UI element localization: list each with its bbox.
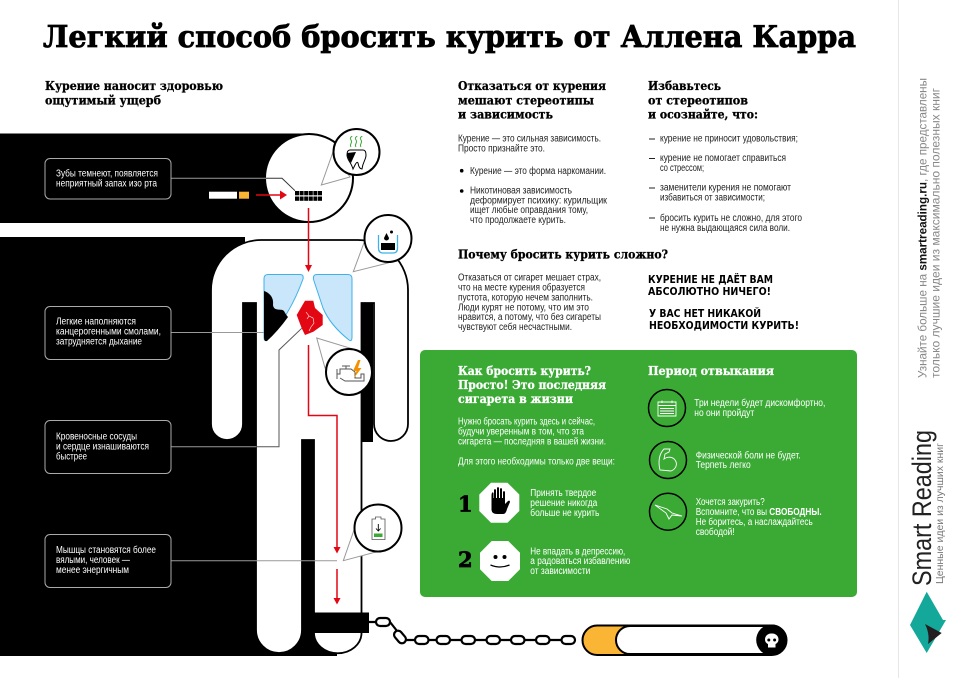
- column: realize: [648, 78, 802, 234]
- step 2: Не впадать в депрессию,: [530, 546, 625, 557]
- withdrawal item: calendar: но они пройдут: [694, 408, 755, 419]
- section: why hard: [458, 246, 668, 333]
- section: why hard: нравится, а потому, что без сигареты: [458, 311, 601, 323]
- step 2: [458, 541, 631, 581]
- callout box: muscles: [45, 534, 337, 588]
- callout box: teeth: неприятный запах изо рта: [56, 179, 157, 190]
- sidebar logo wordmark: Ценные идеи из лучших книг: [935, 443, 946, 584]
- section: why hard: пустота, которую нечем заполнить.: [458, 292, 593, 304]
- callout: battery: [343, 504, 402, 561]
- right lung: [313, 274, 352, 341]
- arrow: to foot: [334, 569, 340, 604]
- withdrawal item: calendar: [648, 390, 825, 426]
- panel: black background of body: [0, 237, 337, 656]
- sidebar promo text: только лучшие идеи из максимально полезных книг: [928, 87, 942, 378]
- withdrawal item: muscle: Терпеть легко: [696, 460, 751, 471]
- callout box: lungs: [45, 306, 264, 360]
- heading: health damage: [45, 78, 223, 108]
- callout box: teeth: [45, 158, 295, 199]
- section: why hard: Люди курят не потому, что им это: [458, 302, 589, 313]
- sidebar logo wordmark: [907, 430, 946, 586]
- icon: smile: [490, 555, 510, 567]
- step 1: [458, 483, 599, 523]
- callout box: muscles: вялыми, человек —: [56, 555, 130, 566]
- sidebar divider: [898, 0, 900, 678]
- column: realize: Избавьтесь: [648, 78, 721, 93]
- callout box: vessels: Кровеносные сосуды: [56, 431, 137, 442]
- section: why hard: Отказаться от сигарет мешает страх,: [458, 273, 601, 284]
- panel: black background of head: [0, 134, 309, 223]
- arrow: smoke into mouth: [256, 190, 287, 200]
- column: stereotypes: Отказаться от курения: [458, 78, 606, 93]
- column: stereotypes: мешают стереотипы: [458, 92, 594, 108]
- icon: teeth: [295, 191, 322, 201]
- withdrawal item: calendar: Три недели будет дискомфортно,: [694, 397, 825, 409]
- step 2: 2: [458, 547, 473, 572]
- withdrawal item: bird: Не боритесь, а наслаждайтесь: [696, 516, 813, 528]
- column: stereotypes: [458, 78, 608, 226]
- withdrawal item: bird: [650, 493, 822, 538]
- emphasis text: НЕОБХОДИМОСТИ КУРИТЬ!: [649, 319, 799, 332]
- step 1: 1: [458, 492, 473, 517]
- withdrawal item: muscle: [650, 442, 801, 478]
- column: realize: курение не приносит удовольствия;: [660, 134, 798, 145]
- heading: how to quit: [458, 363, 606, 406]
- step 2: а радоваться избавлению: [530, 555, 631, 567]
- head circle: [265, 134, 353, 222]
- column: stereotypes: Просто признайте это.: [458, 144, 545, 155]
- step 1: Принять твердое: [530, 488, 597, 499]
- section: why hard: чувствуют себя несчастными.: [458, 321, 572, 333]
- emphasis text: [648, 272, 799, 332]
- step 1: решение никогда: [530, 498, 598, 509]
- icon: skull: [765, 634, 778, 648]
- heading: withdrawal: Период отвыкания: [648, 363, 774, 378]
- withdrawal item: bird: свободой!: [696, 526, 735, 538]
- callout box: vessels: быстрее: [56, 450, 87, 462]
- callout: engine: [317, 338, 372, 395]
- arrow: heart to leg: [308, 345, 340, 554]
- column: stereotypes: и зависимость: [458, 106, 553, 122]
- text: intro: Нужно бросать курить здесь и сейчас,: [458, 416, 595, 428]
- callout: tooth: [321, 129, 380, 185]
- column: realize: заменители курения не помогают: [660, 183, 791, 194]
- column: stereotypes: деформирует психику: курильщик: [470, 194, 608, 206]
- column: realize: курение не помогает справиться: [660, 153, 786, 164]
- callout box: muscles: Мышцы становятся более: [56, 544, 156, 556]
- text: intro: [458, 416, 615, 467]
- emphasis text: У ВАС НЕТ НИКАКОЙ: [649, 307, 761, 320]
- heading: health damage: Курение наносит здоровью: [45, 78, 223, 93]
- column: realize: со стрессом;: [660, 163, 704, 174]
- column: stereotypes: Курение — это форма наркомании.: [470, 165, 606, 177]
- withdrawal item: bird: Вспомните, что вы СВОБОДНЫ.: [696, 507, 822, 518]
- column: realize: избавиться от зависимости;: [660, 192, 765, 204]
- sidebar logo book: [910, 592, 946, 653]
- column: stereotypes: Курение — это сильная зависимость.: [458, 134, 601, 145]
- title: Легкий способ бросить курить от Аллена Карра: [43, 19, 856, 54]
- text: intro: Для этого необходимы только две вещи:: [458, 455, 615, 467]
- column: realize: и осознайте, что:: [648, 106, 758, 122]
- left lung: tar-filled: [264, 274, 303, 341]
- column: realize: бросить курить не сложно, для этого: [660, 212, 802, 224]
- heart: [297, 301, 323, 335]
- section: why hard: что на месте курения образуется: [458, 282, 585, 294]
- callout box: lungs: затрудняется дыхание: [56, 336, 142, 347]
- panel: how to quit: [420, 350, 857, 597]
- text: intro: сигарета — последняя в вашей жизни.: [458, 436, 606, 448]
- withdrawal item: muscle: Физической боли не будет.: [696, 449, 801, 461]
- step 2: от зависимости: [530, 566, 590, 577]
- text: intro: будучи уверенным в том, что эта: [458, 426, 584, 438]
- callout box: lungs: канцерогенными смолами,: [56, 326, 161, 337]
- emphasis text: АБСОЛЮТНО НИЧЕГО!: [648, 285, 771, 298]
- sidebar logo wordmark: Smart Reading: [907, 430, 937, 586]
- callout: tar drop: [353, 215, 412, 272]
- heading: how to quit: Как бросить курить?: [458, 363, 591, 378]
- emphasis text: КУРЕНИЕ НЕ ДАЁТ ВАМ: [648, 272, 773, 286]
- column: stereotypes: что продолжаете курить.: [470, 215, 566, 226]
- column: stereotypes: ищет любые оправдания тому,: [470, 204, 588, 216]
- heading: how to quit: Просто! Это последняя: [458, 377, 606, 392]
- section: why hard: Почему бросить курить сложно?: [458, 246, 668, 261]
- column: realize: не нужна выдающаяся сила воли.: [660, 223, 790, 234]
- cigarette small: [209, 192, 249, 199]
- heading: how to quit: сигарета в жизни: [458, 391, 573, 406]
- callout box: teeth: Зубы темнеют, появляется: [56, 168, 158, 180]
- step 1: больше не курить: [530, 507, 599, 519]
- column: realize: от стереотипов: [648, 92, 748, 108]
- withdrawal item: bird: Хочется закурить?: [696, 497, 765, 508]
- arrow: head to lungs: [305, 208, 312, 272]
- heading: health damage: ощутимый ущерб: [45, 92, 161, 108]
- sidebar promo text: Узнайте больше на smartreading.ru, где представлены: [916, 78, 930, 378]
- callout box: lungs: Легкие наполняются: [56, 316, 136, 327]
- callout box: muscles: менее энергичным: [56, 565, 129, 576]
- callout box: vessels: [45, 328, 302, 474]
- body figure: [211, 240, 408, 653]
- cigarette large with skull: [582, 624, 787, 656]
- column: stereotypes: Никотиновая зависимость: [470, 185, 572, 196]
- sidebar promo text: [916, 78, 942, 378]
- icon: hand: [492, 487, 510, 514]
- callout box: vessels: и сердце изнашиваются: [56, 441, 149, 452]
- chain: [369, 618, 575, 645]
- ankle shackle: [314, 612, 369, 633]
